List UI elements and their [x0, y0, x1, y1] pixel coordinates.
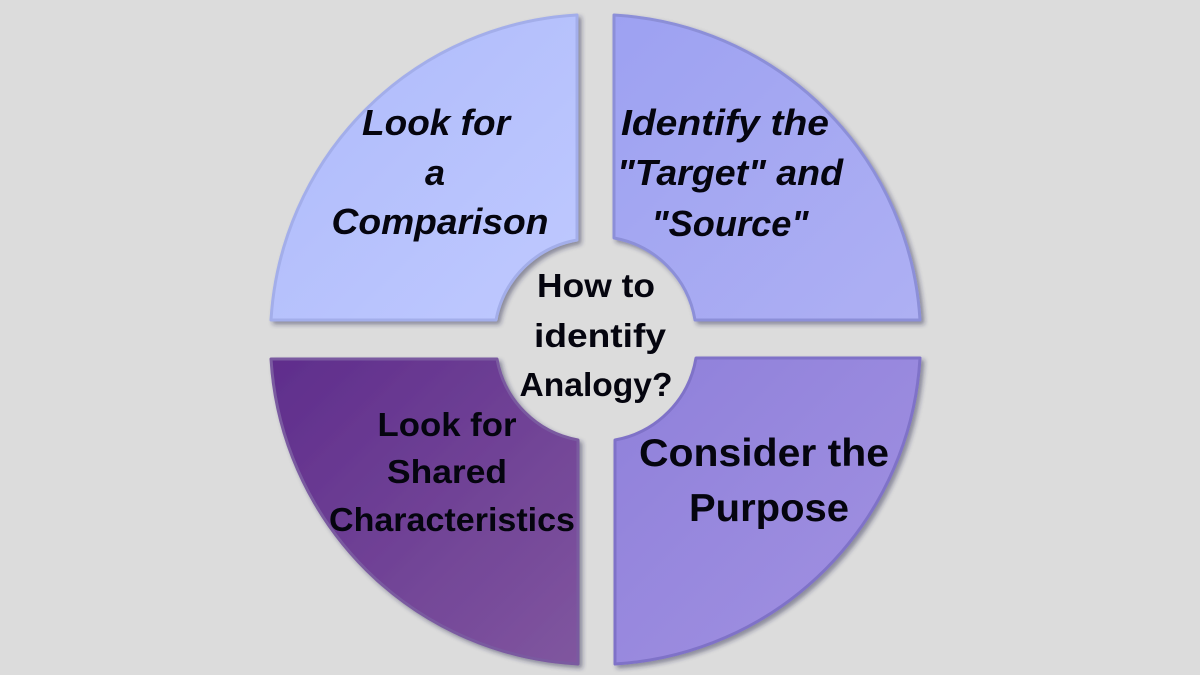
text: identify target and source: "Source" — [652, 203, 809, 244]
center label: how to identify analogy: How to — [537, 267, 655, 304]
text: look for a comparison: Look for — [362, 102, 512, 143]
center label: how to identify analogy — [520, 267, 672, 403]
panel: identify target and source — [614, 15, 920, 320]
panel: look for a comparison — [271, 15, 577, 320]
center label: how to identify analogy: Analogy? — [520, 366, 672, 403]
text: look for shared characteristics: Shared — [387, 453, 507, 490]
text: identify target and source: Identify the — [621, 102, 829, 143]
text: consider the purpose: Purpose — [689, 487, 849, 530]
text: look for shared characteristics: Characteristics — [329, 501, 575, 538]
text: look for a comparison: a — [425, 152, 445, 193]
text: look for a comparison: Comparison — [332, 201, 548, 242]
text: consider the purpose — [639, 432, 889, 530]
panel: look for shared characteristics — [271, 359, 578, 664]
text: look for a comparison — [332, 102, 548, 242]
center label: how to identify analogy: identify — [534, 317, 667, 354]
text: look for shared characteristics: Look for — [378, 406, 517, 443]
text: identify target and source: "Target" and — [617, 152, 844, 193]
text: identify target and source — [617, 102, 844, 244]
text: consider the purpose: Consider the — [639, 432, 889, 475]
panel: consider the purpose — [615, 358, 920, 664]
text: look for shared characteristics — [329, 406, 575, 538]
